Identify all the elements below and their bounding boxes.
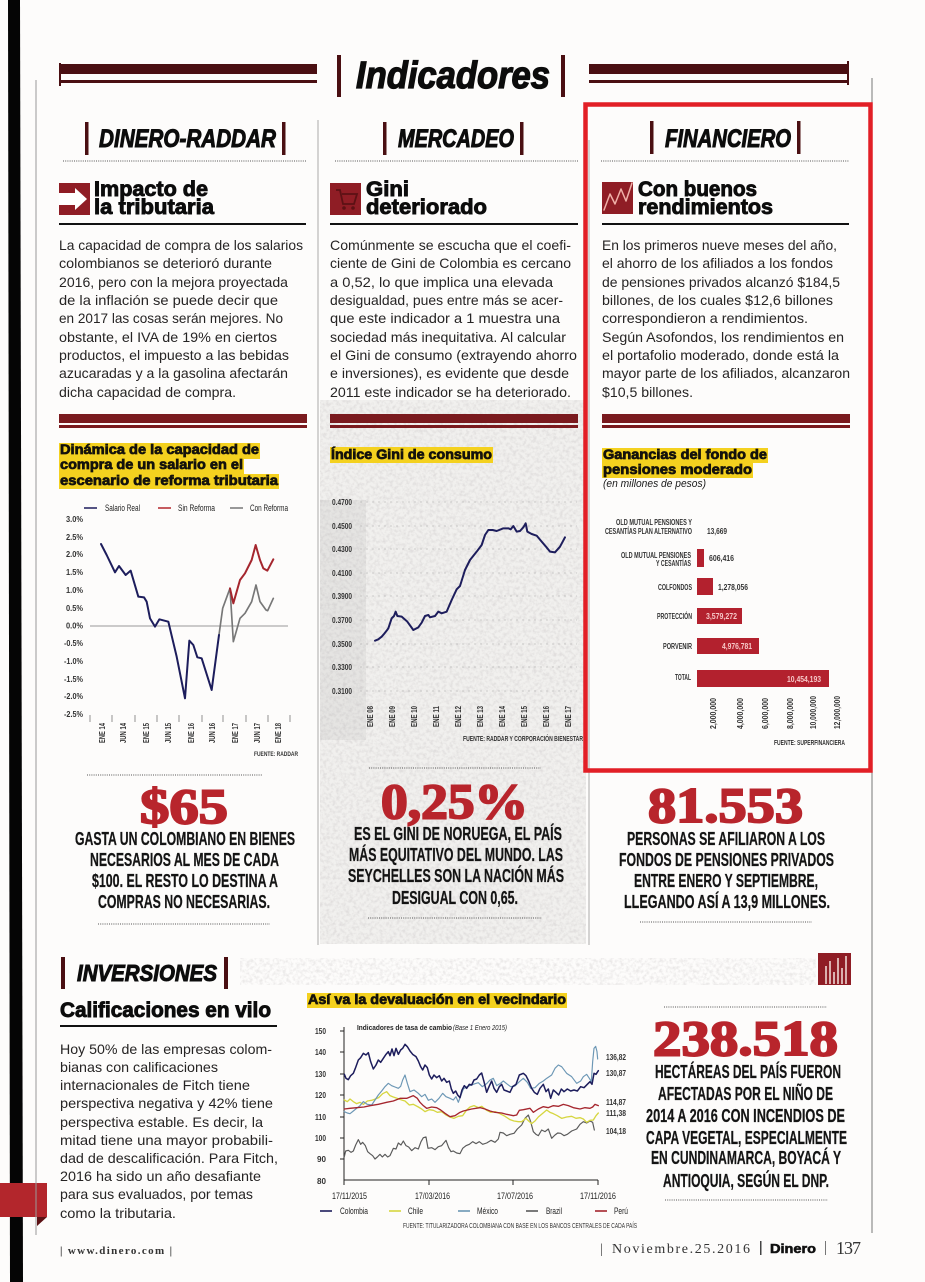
bar: old mutual (621, 549, 734, 568)
series end values: 111,38 (606, 1109, 626, 1118)
chart legend: México (477, 1206, 498, 1216)
callout: 81.553: ENTRE ENERO Y SEPTIEMBRE, (634, 870, 818, 891)
callout: 238.518 (646, 1010, 847, 1191)
x axis labels: 8,000,000 (786, 698, 795, 729)
body text: mercadeo: e inversiones), es evidente que desde (330, 365, 569, 381)
body text: calificaciones: como la tributaria. (60, 1205, 176, 1221)
chart legend: Salario Real (105, 503, 140, 513)
chart title: ganancias del fondo de pensiones moderado: Ganancias del fondo de (603, 446, 767, 462)
body text: mercadeo: sociedad más inequitativa. Al calcular (330, 329, 566, 345)
x axis labels: ENE 09 (388, 706, 397, 727)
bar: porvenir (663, 638, 759, 654)
x axis labels: 17/03/2016 (415, 1191, 450, 1201)
y axis labels: 0.4100 (332, 569, 352, 578)
bar: old mutual plan alternativo (605, 518, 727, 536)
section heading: dinero-raddar: DINERO-RADDAR (99, 125, 276, 153)
heading: calificaciones en vilo: Calificaciones en vilo (60, 999, 271, 1022)
x axis labels: ENE 18 (274, 723, 283, 743)
body text: mercadeo: a 0,52, lo que implica una elevada (330, 274, 553, 290)
body text: dinero-raddar: dicha capacidad de compra. (59, 384, 236, 400)
chart title: dinámica de la capacidad de compra: escenario de reforma tributaria (60, 472, 278, 488)
y axis labels: 120 (315, 1091, 326, 1100)
body text: financiero: de pensiones privados alcanzó $184,5 (602, 274, 840, 290)
body text: mercadeo: Comúnmente se escucha que el coefi- (330, 237, 571, 253)
series end values: 130,87 (606, 1069, 626, 1078)
x axis labels: 17/07/2016 (497, 1191, 533, 1201)
footer: date, brand and page number: | (600, 1242, 603, 1257)
callout: 0,25%: DESIGUAL CON 0,65. (392, 887, 518, 908)
body text: calificaciones: 2016 ha sido un año desafiante (60, 1168, 261, 1184)
main title: Indicadores: Indicadores (356, 55, 550, 97)
series end values: 136,82 (606, 1053, 626, 1062)
panel: calificaciones en vilo (60, 999, 278, 1221)
callout: $65 (75, 778, 295, 912)
body text: mercadeo: ciente de Gini de Colombia es cercano (330, 255, 571, 271)
y axis labels: 100 (315, 1134, 326, 1143)
y axis labels: -2.5% (64, 710, 83, 719)
series end values: 104,18 (606, 1127, 626, 1136)
y axis labels: 0.3100 (332, 687, 352, 696)
y axis labels: -2.0% (64, 692, 83, 701)
callout: 0,25%: MÁS EQUITATIVO DEL MUNDO. LAS (349, 844, 563, 865)
series end values: 114,87 (606, 1098, 626, 1107)
heading: gini deteriorado: Gini (366, 178, 409, 201)
body text: financiero: correspondieron a rendimientos. (602, 310, 808, 326)
y axis labels: 0.0% (66, 622, 83, 630)
section heading: dinero-raddar (63, 122, 307, 161)
x axis labels: 2,000,000 (709, 698, 718, 729)
chart title: índice gini de consumo: Índice Gini de consumo (331, 446, 492, 462)
body text: financiero: En los primeros nueve meses del año, (602, 237, 837, 253)
y axis labels: 2.0% (66, 550, 83, 559)
icon: arrow (59, 183, 90, 215)
line chart: tasa de cambio (315, 1023, 637, 1230)
y axis labels: 2.5% (66, 533, 83, 542)
heading: con buenos rendimientos: Con buenos (638, 178, 757, 201)
heading: impacto de la tributaria: Impacto de (94, 178, 208, 201)
chart title: así va la devaluación: Así va la devaluación en el vecindario (308, 991, 566, 1007)
x axis labels: 17/11/2015 (332, 1191, 367, 1201)
bar: porvenir: PORVENIR (663, 642, 692, 651)
x axis labels: JUN 17 (253, 723, 262, 743)
callout: $65: $65 (140, 778, 228, 834)
x axis labels: 10,000,000 (809, 696, 818, 729)
y axis labels: 150 (315, 1027, 326, 1036)
callout: $65: COMPRAS NO NECESARIAS. (98, 891, 270, 912)
body text: calificaciones (60, 1041, 278, 1221)
body text: calificaciones: internacionales de Fitch tiene (60, 1077, 250, 1093)
series end values (606, 1053, 626, 1136)
red highlight frame (586, 104, 870, 770)
y axis labels: 0.3900 (332, 592, 352, 601)
bar chart: ganancias por fondo (605, 518, 845, 747)
body text: calificaciones: perspectiva negativa y 42% tiene (60, 1095, 273, 1111)
source: titularizadora colombiana: FUENTE: TITULARIZADORA COLOMBIANA CON BASE EN LOS BANCOS CENTRALES DE CADA PAÍS (403, 1221, 637, 1230)
y axis labels: 1.0% (66, 586, 83, 595)
x axis labels: ENE 16 (187, 723, 196, 743)
source: raddar y corporación bienestar: FUENTE: RADDAR Y CORPORACIÓN BIENESTAR (463, 734, 583, 743)
section heading: mercadeo: MERCADEO (398, 125, 514, 153)
chart legend: Con Reforma (250, 503, 288, 513)
body text: financiero: mayor parte de los afiliados, alcanzaron (602, 365, 850, 381)
body text: dinero-raddar: colombianos se deterioró durante (59, 255, 272, 271)
body text: dinero-raddar (59, 237, 303, 400)
x axis labels: JUN 16 (208, 723, 217, 743)
callout: 81.553: PERSONAS SE AFILIARON A LOS (627, 828, 825, 849)
section heading: financiero: FINANCIERO (665, 125, 791, 153)
callout: 0,25%: 0,25% (381, 773, 528, 829)
y axis labels: 0.4500 (332, 522, 352, 531)
y axis labels: -1.0% (64, 657, 83, 666)
callout: 81.553: 81.553 (648, 777, 803, 833)
bar: old mutual plan alternativo: OLD MUTUAL PENSIONES Y (616, 518, 692, 527)
chart legend: Brazil (546, 1206, 562, 1216)
source: superfinanciera: FUENTE: SUPERFINANCIERA (774, 740, 845, 747)
x axis labels (332, 1191, 616, 1201)
chart legend: Sin Reforma (178, 503, 215, 513)
bar: total (675, 670, 829, 687)
chart legend (84, 503, 288, 513)
body text: dinero-raddar: obstante, el IVA de 19% en ciertos (59, 329, 277, 345)
callout: $65: GASTA UN COLOMBIANO EN BIENES (75, 828, 295, 849)
body text: mercadeo: desigualdad, pues entre más se acer- (330, 292, 563, 308)
y axis labels: 0.3500 (332, 640, 352, 649)
chart legend: Chile (408, 1206, 423, 1216)
chart legend: Colombia (340, 1206, 368, 1216)
x axis labels: JUN 15 (164, 723, 173, 743)
y axis labels: 110 (315, 1113, 326, 1122)
icon: shopping cart (330, 183, 361, 215)
y axis labels: 130 (315, 1070, 326, 1079)
body text: dinero-raddar: de la inflación se puede decir que (59, 292, 278, 308)
body text: mercadeo: el Gini de consumo (extrayendo ahorro (330, 347, 577, 363)
x axis labels: ENE 17 (231, 723, 240, 743)
x axis labels: 4,000,000 (736, 698, 745, 729)
callout: 238.518: ANTIOQUIA, SEGÚN EL DNP. (663, 1170, 829, 1191)
x axis labels (366, 706, 573, 727)
chart subtitle: Indicadores de tasa de cambio (357, 1023, 452, 1032)
y axis labels: 0.4300 (332, 545, 352, 554)
chart subtitle: (Base 1 Enero 2015) (453, 1023, 507, 1032)
body text: calificaciones: para sus evaluados, por temas (60, 1186, 253, 1202)
x axis labels: 12,000,000 (833, 696, 842, 729)
bar: protección: 3,579,272 (706, 612, 737, 621)
callout: 238.518: AFECTADAS POR EL NIÑO DE (658, 1083, 833, 1104)
body text: financiero: billones, de los cuales $12,6 billones (602, 292, 833, 308)
page spine bar (8, 0, 23, 1282)
panel: dinero-raddar (59, 122, 307, 924)
body text: financiero: $10,5 billones. (602, 384, 693, 400)
heading: con buenos rendimientos: rendimientos (638, 196, 773, 219)
y axis labels (64, 515, 83, 719)
x axis labels: ENE 10 (410, 706, 419, 727)
bar: colfondos: 1,278,056 (718, 583, 748, 592)
mottled background: mercadeo column (320, 400, 586, 944)
section heading: inversiones: INVERSIONES (77, 960, 218, 986)
x axis labels: ENE 12 (454, 706, 463, 727)
body text: calificaciones: bianas con calificaciones (60, 1059, 218, 1075)
footer: date, brand and page number: Noviembre.25.2016 (612, 1242, 750, 1257)
body text: mercadeo: que este indicador a 1 muestra una (330, 310, 560, 326)
footer: website: | www.dinero.com | (60, 1245, 172, 1257)
y axis labels: 90 (317, 1155, 327, 1164)
heading: con buenos rendimientos (602, 178, 849, 225)
red page tab (0, 1183, 47, 1226)
x axis labels: ENE 17 (564, 706, 573, 727)
chart title: ganancias del fondo de pensiones moderado (602, 446, 768, 490)
body text: mercadeo: 2011 este indicador se ha deteriorado. (330, 384, 571, 400)
body text: financiero: el ahorro de los afiliados a los fondos (602, 255, 833, 271)
x axis labels: 6,000,000 (761, 698, 770, 729)
x axis labels: ENE 13 (476, 706, 485, 727)
y axis labels: -0.5% (64, 639, 83, 648)
heading: impacto de la tributaria (59, 178, 306, 225)
x axis labels: ENE 08 (366, 706, 375, 727)
bar: old mutual plan alternativo: CESANTÍAS PLAN ALTERNATIVO (605, 527, 692, 536)
section heading: mercadeo (335, 122, 578, 161)
panel: mercadeo (330, 122, 583, 918)
icon: bar chart (818, 953, 851, 985)
heading: gini deteriorado: deteriorado (366, 196, 487, 219)
y axis labels: 0.5% (66, 604, 83, 613)
footer: date, brand and page number: 137 (836, 1238, 861, 1258)
source: raddar: FUENTE: RADDAR (254, 751, 298, 758)
bar: colfondos (658, 578, 748, 595)
y axis labels (332, 498, 352, 696)
chart title: ganancias del fondo de pensiones moderado: pensiones moderado (603, 461, 752, 477)
y axis labels: 80 (317, 1177, 327, 1186)
chart legend: Perú (614, 1206, 628, 1216)
callout: 0,25% (348, 773, 564, 908)
y axis labels: 3.0% (66, 515, 83, 524)
chart title: dinámica de la capacidad de compra: compra de un salario en el (60, 456, 243, 472)
x axis labels: 17/11/2016 (580, 1191, 616, 1201)
bar: protección (657, 608, 742, 624)
x axis labels: ENE 15 (520, 706, 529, 727)
callout: $65: $100. EL RESTO LO DESTINA A (92, 870, 278, 891)
callout: 238.518: 238.518 (653, 1010, 838, 1066)
x axis labels: JUN 14 (119, 723, 128, 743)
x axis labels (709, 696, 842, 729)
callout: 0,25%: SEYCHELLES SON LA NACIÓN MÁS (348, 865, 564, 886)
bar: old mutual: 606,416 (709, 554, 734, 563)
bar: protección: PROTECCIÓN (657, 612, 692, 621)
footer: date, brand and page number (600, 1238, 861, 1258)
bar: colfondos: COLFONDOS (658, 583, 692, 592)
body text: dinero-raddar: azucaradas y a la gasolina afectarán (59, 365, 288, 381)
chart title: dinámica de la capacidad de compra (59, 441, 279, 489)
icon: rising line (602, 182, 633, 214)
heading: gini deteriorado (330, 178, 578, 225)
heading: impacto de la tributaria: la tributaria (94, 196, 214, 219)
y axis labels: -1.5% (64, 675, 83, 684)
body text: dinero-raddar: productos, el impuesto a las bebidas (59, 347, 289, 363)
body text: dinero-raddar: 2016, pero con la mejora proyectada (59, 274, 288, 290)
mottled band: inversiones header (240, 958, 816, 985)
chart title: dinámica de la capacidad de compra: Dinámica de la capacidad de (60, 441, 259, 457)
bar: total: TOTAL (675, 673, 691, 682)
bar: total: 10,454,193 (787, 675, 821, 684)
panel: financiero (601, 121, 850, 922)
body text: financiero: Según Asofondos, los rendimientos en (602, 329, 844, 345)
callout: 0,25%: ES EL GINI DE NORUEGA, EL PAÍS (354, 823, 562, 844)
body text: mercadeo (330, 237, 577, 400)
body text: calificaciones: Hoy 50% de las empresas colom- (60, 1041, 272, 1057)
line chart: índice gini (332, 498, 583, 743)
callout: 81.553 (619, 777, 834, 912)
chart legend (320, 1206, 628, 1216)
footer: date, brand and page number: Dinero (770, 1241, 816, 1256)
x axis labels: ENE 14 (98, 723, 107, 743)
x axis labels: ENE 15 (142, 723, 151, 743)
body text: financiero (602, 237, 850, 400)
body text: calificaciones: dad de descalificación. Para Fitch, (60, 1150, 278, 1166)
y axis labels: 1.5% (66, 568, 83, 577)
y axis labels: 0.3300 (332, 663, 352, 672)
body text: calificaciones: perspectiva estable. Es decir, la (60, 1114, 263, 1130)
body text: dinero-raddar: en 2017 las cosas serán mejores. No (59, 310, 283, 326)
bar: old mutual: Y CESANTÍAS (656, 559, 691, 568)
chart title: ganancias del fondo de pensiones moderado: (en millones de pesos) (603, 478, 706, 490)
callout: 81.553: LLEGANDO ASÍ A 13,9 MILLONES. (624, 891, 830, 912)
y axis labels (315, 1027, 327, 1186)
x axis labels: ENE 16 (542, 706, 551, 727)
y axis labels: 140 (315, 1048, 326, 1057)
body text: dinero-raddar: La capacidad de compra de los salarios (59, 237, 303, 253)
y axis labels: 0.4700 (332, 498, 352, 507)
body text: calificaciones: mitad tiene una mayor probabili- (60, 1132, 273, 1148)
x axis labels (90, 715, 290, 743)
main title: Indicadores (59, 55, 849, 97)
line chart: capacidad de compra (64, 503, 298, 758)
callout: $65: NECESARIOS AL MES DE CADA (90, 849, 279, 870)
section heading: financiero (601, 121, 849, 161)
bar: old mutual plan alternativo: 13,669 (707, 527, 727, 536)
bar: porvenir: 4,976,781 (722, 642, 752, 651)
y axis labels: 0.3700 (332, 616, 352, 625)
x axis labels: ENE 14 (498, 706, 507, 727)
bar: old mutual: OLD MUTUAL PENSIONES (621, 551, 691, 560)
panel: devaluación en el vecindario (307, 991, 637, 1230)
body text: financiero: el portafolio moderado, donde está la (602, 347, 839, 363)
x axis labels: ENE 11 (432, 706, 441, 727)
